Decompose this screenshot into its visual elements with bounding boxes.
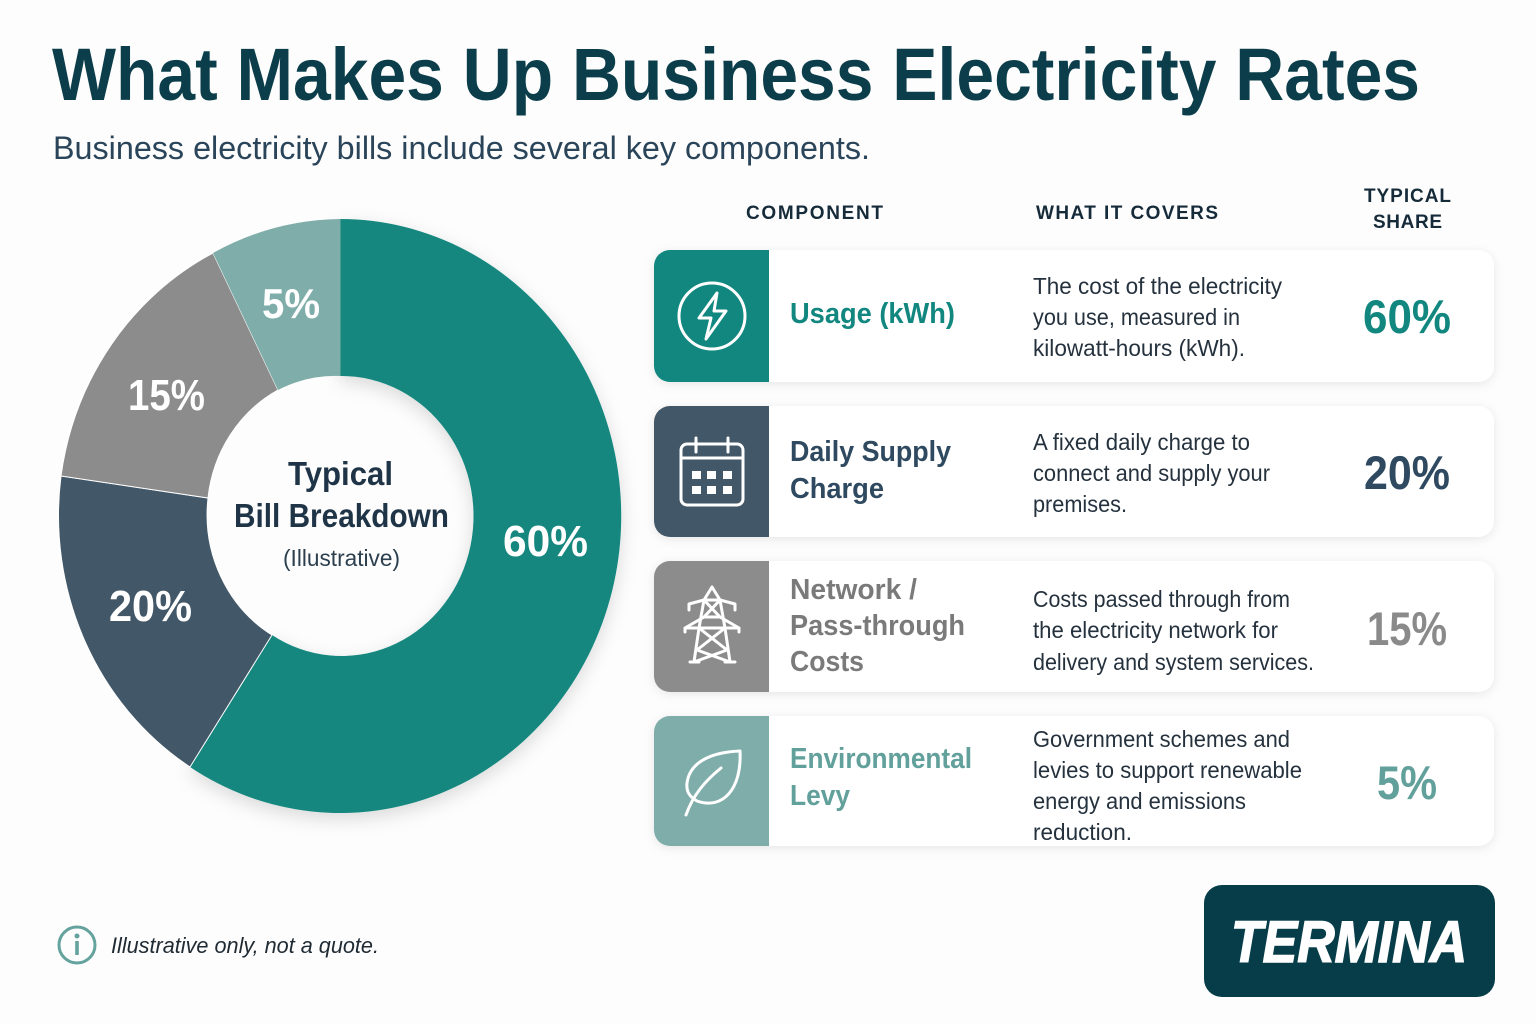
share: 60%: 60% <box>1363 290 1451 343</box>
share: 5%: 5% <box>1377 756 1437 809</box>
icon: lightning bolt <box>679 283 745 349</box>
component name: usage: Usage (kWh) <box>790 298 955 330</box>
description: network <box>1033 586 1314 675</box>
panel: network row <box>654 561 1494 692</box>
panel: environmental row <box>654 716 1494 846</box>
label: 15%: 15% <box>128 371 205 420</box>
logo: TERMINA <box>1204 885 1495 997</box>
segment: environmental 5% <box>213 219 340 390</box>
description: network: the electricity network for <box>1033 617 1278 643</box>
description: daily supply: premises. <box>1033 491 1127 517</box>
share: 15%: 15% <box>1367 602 1447 655</box>
table headers: WHAT IT COVERS <box>1036 203 1218 224</box>
component name: network costs: Network / <box>790 574 917 606</box>
panel: usage row <box>654 250 1494 382</box>
donut centre text: Typical <box>288 455 393 492</box>
component name: daily supply charge <box>790 436 951 505</box>
subtitle: Business electricity bills include several key components. <box>53 130 870 166</box>
description: network: Costs passed through from <box>1033 586 1290 612</box>
title: What Makes Up Business Electricity Rates <box>52 33 1420 116</box>
table headers <box>746 186 1451 233</box>
label: 20%: 20% <box>109 582 192 631</box>
footnote text: Illustrative only, not a quote. <box>111 933 379 958</box>
component name: environmental levy: Environmental <box>790 743 972 775</box>
component name: daily supply charge: Daily Supply <box>790 436 951 468</box>
component name: network costs <box>790 574 965 678</box>
segment: usage 60% <box>190 219 621 813</box>
share: 20%: 20% <box>1364 446 1450 499</box>
table headers: COMPONENT <box>746 203 883 224</box>
footnote <box>59 927 379 963</box>
icon: leaf <box>686 751 740 815</box>
panel: daily supply row <box>654 406 1494 537</box>
component name: network costs: Pass-through <box>790 610 965 642</box>
description: environmental: reduction. <box>1033 819 1132 845</box>
donut centre text <box>234 455 449 571</box>
description: environmental: levies to support renewable <box>1033 757 1302 783</box>
description: network: delivery and system services. <box>1033 649 1314 675</box>
segment: daily supply 20% <box>59 476 272 767</box>
table headers: TYPICAL <box>1364 186 1451 207</box>
donut chart: typical bill breakdown <box>59 219 621 813</box>
component name: daily supply charge: Charge <box>790 473 884 505</box>
icon: calendar <box>681 438 743 505</box>
description: usage: you use, measured in <box>1033 304 1240 330</box>
component name: network costs: Costs <box>790 646 864 678</box>
icon: transmission tower <box>685 587 739 662</box>
description: usage <box>1033 273 1282 361</box>
label: 5%: 5% <box>262 280 320 327</box>
donut centre text: (Illustrative) <box>283 545 400 571</box>
description: usage: The cost of the electricity <box>1033 273 1282 299</box>
segment: network 15% <box>61 253 278 498</box>
description: usage: kilowatt-hours (kWh). <box>1033 335 1245 361</box>
description: daily supply <box>1033 429 1270 517</box>
component name: environmental levy <box>790 743 972 812</box>
donut centre text: Bill Breakdown <box>234 497 449 534</box>
component name: environmental levy: Levy <box>790 780 850 812</box>
description: daily supply: connect and supply your <box>1033 460 1270 486</box>
description: environmental: Government schemes and <box>1033 726 1290 752</box>
description: daily supply: A fixed daily charge to <box>1033 429 1250 455</box>
table headers: SHARE <box>1373 212 1442 233</box>
description: environmental: energy and emissions <box>1033 788 1246 814</box>
icon: info <box>59 927 95 963</box>
logo: TERMINA: TERMINA <box>1231 910 1467 975</box>
label: 60%: 60% <box>503 517 588 566</box>
description: environmental <box>1033 726 1302 845</box>
